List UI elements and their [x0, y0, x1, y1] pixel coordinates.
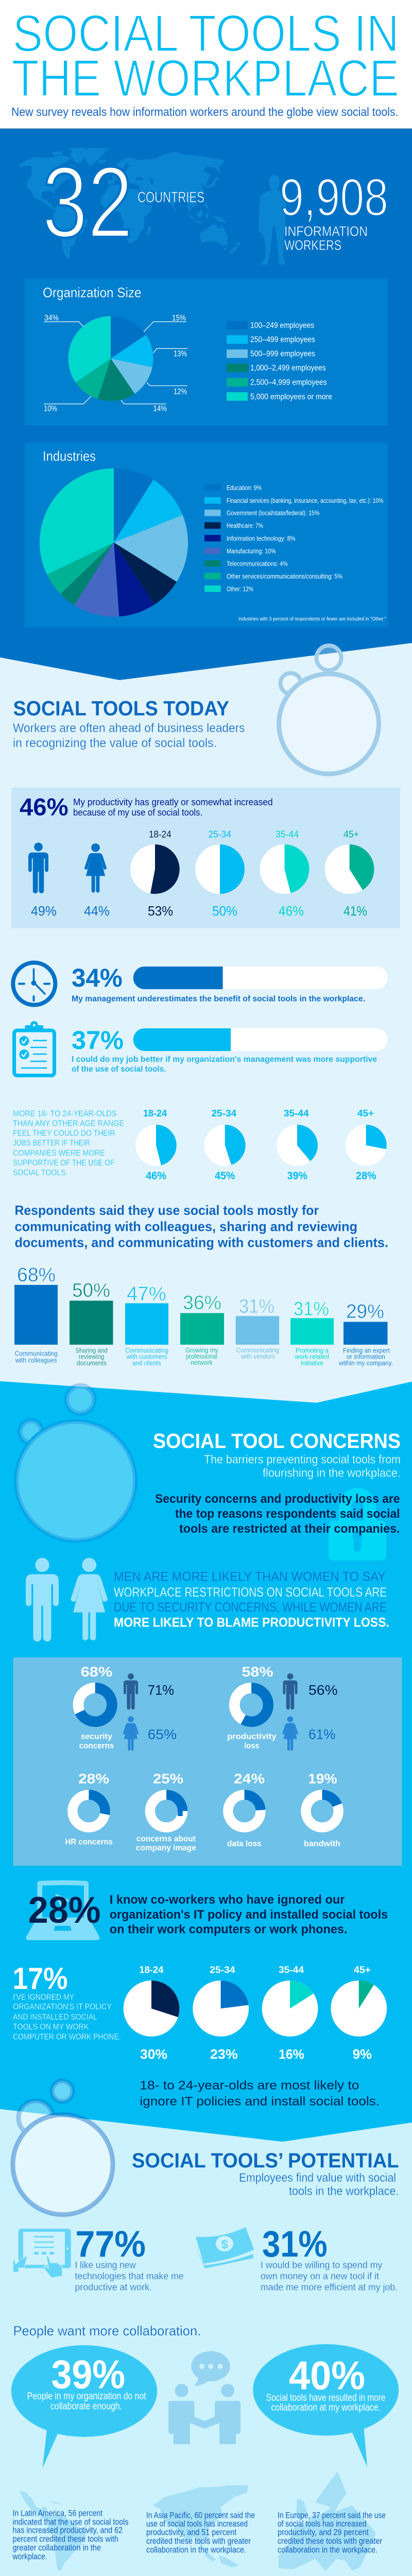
text block: men vs women: MEN ARE MORE LIKELY THAN WOMEN TO SAY	[114, 1569, 386, 1584]
bar: communicating with customers and clients: and clients	[132, 1359, 161, 1367]
panel: concerns breakdown	[13, 1657, 402, 1866]
donut: data loss	[227, 1771, 265, 1849]
statement: 18 to 24 year olds ignore policies	[140, 2078, 380, 2109]
text block: 18 to 24 year olds: SOCIAL TOOLS.	[13, 1168, 68, 1177]
speech bubble: 39%: 39%	[52, 2352, 125, 2397]
stat: 9,908 information workers	[280, 168, 388, 253]
pie: age 45+	[325, 844, 374, 894]
statement: co-workers: on their work computers or work phones.	[110, 1923, 348, 1936]
pie row: supportive by age: 25-34	[212, 1108, 236, 1118]
intro: employees find value: Employees find value with social	[239, 2171, 396, 2184]
pie: age 18-24	[130, 844, 180, 894]
text: Latin America: percent credited these tools with	[12, 2534, 118, 2544]
donut: data loss: data loss	[227, 1840, 262, 1849]
bar: finding an expert	[338, 1301, 393, 1367]
text: Latin America: indicated that the use of social tools	[12, 2517, 129, 2527]
statement: productivity: because of my use of social tools.	[73, 807, 202, 818]
bar: growing my professional network: network	[191, 1359, 213, 1366]
donut: security concerns: security	[81, 1733, 112, 1741]
values: 53%	[148, 903, 173, 919]
donut: bandwith: 19%	[308, 1771, 337, 1786]
text: Asia Pacific: collaboration in the workplace.	[146, 2545, 246, 2554]
donut: HR concerns	[65, 1771, 113, 1846]
pie chart: organization size	[68, 316, 153, 401]
text: Latin America	[12, 2508, 129, 2561]
text block: 18 to 24 year olds: JOBS BETTER IF THEIR	[13, 1139, 90, 1148]
text block: men vs women	[114, 1569, 389, 1630]
text: Europe: collaboration in the workplace.	[278, 2545, 377, 2554]
text: Europe: In Europe, 37 percent said the use	[278, 2510, 386, 2520]
statement: top reasons: the top reasons respondents said social	[175, 1507, 400, 1521]
bar: promoting a work-related initiative: 31%	[294, 1298, 329, 1320]
legend: industries	[204, 484, 383, 592]
region: Europe	[278, 2471, 386, 2571]
donut: bandwith: bandwith	[304, 1840, 340, 1849]
pie row: supportive by age: 45%	[215, 1170, 235, 1182]
values: 50%	[212, 903, 237, 919]
panel: industries	[25, 443, 388, 627]
pie row: ignored policy by age: 35-44	[279, 1965, 304, 1975]
title	[11, 5, 399, 108]
bar: communicating with colleagues: Communicating	[15, 1350, 58, 1357]
donut: HR concerns: HR concerns	[65, 1838, 113, 1846]
world map	[14, 147, 241, 259]
pie row: supportive by age: 46%	[146, 1170, 166, 1182]
heading: social tools today: SOCIAL TOOLS TODAY	[13, 697, 229, 720]
bar: communicating with vendors: with vendors	[241, 1352, 275, 1360]
pie leader lines and percentages: 15%	[172, 314, 186, 323]
heading: how respondents use social tools: Respondents said they use social tools mostly for	[14, 1202, 319, 1218]
stat: 77% new technologies	[75, 2224, 184, 2293]
legend: organization size: 1,000–2,499 employees	[250, 364, 326, 372]
pie leader lines and percentages: 10%	[44, 404, 57, 413]
values: 41%	[344, 903, 367, 919]
heading: social tool concerns: SOCIAL TOOL CONCERNS	[153, 1430, 401, 1453]
heading: how respondents use social tools	[14, 1202, 388, 1250]
bar: sharing and reviewing documents: documents	[77, 1359, 107, 1367]
icon: clipboard	[14, 1021, 55, 1076]
pie leader lines and percentages: 12%	[174, 387, 187, 396]
legend: industries: Other services/communications/consulting: 5%	[227, 572, 342, 580]
statement: top reasons: Security concerns and productivity loss are	[155, 1492, 400, 1506]
intro: barriers: flourishing in the workplace.	[263, 1466, 401, 1480]
stat: 34% management	[72, 963, 387, 1003]
text: Latin America: has increased productivity, and 62	[12, 2526, 123, 2535]
panel: organization size	[25, 279, 388, 426]
background: survey overview section	[0, 129, 412, 680]
legend: industries: Manufacturing: 10%	[227, 547, 276, 555]
pie: age 35-44	[260, 844, 309, 894]
panel: productivity 46%	[11, 788, 400, 928]
icon: man 49%	[28, 842, 48, 893]
icon: group of people ghost, potential section	[13, 2081, 113, 2214]
icon: lock	[329, 1494, 386, 1561]
pie row: ignored policy by age: 45+	[354, 1965, 371, 1975]
intro text	[13, 721, 245, 750]
stat: 32 countries	[42, 146, 204, 259]
statement: supportive: of the use of social tools.	[72, 1065, 166, 1074]
donut: company image: company image	[136, 1844, 196, 1853]
bar: finding an expert: Finding an expert	[343, 1347, 390, 1354]
heading: industries: Industries	[43, 449, 96, 464]
bar chart: uses of social tools	[14, 1264, 393, 1367]
pie leader lines and percentages	[44, 314, 187, 413]
speech bubble: 39%: People in my organization do not	[27, 2391, 146, 2402]
donut: productivity loss: loss	[244, 1741, 260, 1750]
statement: new technologies: technologies that make me	[75, 2270, 184, 2281]
age labels	[149, 829, 359, 840]
statement: productivity	[73, 797, 273, 818]
statement: ignored IT policy: ORGANIZATION'S IT POLICY	[13, 2003, 112, 2011]
text: Asia Pacific: productivity, and 51 percent	[146, 2528, 236, 2537]
icon: tablet with hands	[13, 2229, 71, 2278]
background: concerns section	[0, 1381, 412, 2142]
pie row: supportive by age: 18-24	[143, 1108, 167, 1118]
donut: company image: concerns about	[136, 1835, 196, 1843]
heading: social tools today	[13, 697, 245, 750]
icon: woman 44%	[84, 843, 107, 893]
statement: supportive: I could do my job better if my organization's management was more supportive	[72, 1055, 377, 1064]
gender split: productivity loss: 61%	[308, 1727, 336, 1742]
age labels: 18-24	[149, 829, 171, 840]
stat: 46%: 46%	[20, 793, 68, 821]
bar: communicating with colleagues: 68%	[17, 1264, 56, 1286]
statement: new technologies: I like using new	[75, 2260, 136, 2270]
pie row: ignored policy by age: 16%	[279, 2046, 304, 2062]
icon: group of people ghost, today section	[279, 646, 379, 774]
bar: communicating with customers and clients: with customers	[126, 1353, 167, 1361]
text: Latin America: In Latin America, 56 percent	[12, 2508, 102, 2518]
bar: 34%	[133, 967, 387, 989]
pie leader lines and percentages: 34%	[44, 314, 59, 323]
icon: money bill	[195, 2227, 254, 2268]
values: 44%	[84, 903, 110, 919]
statement: 18 to 24 year olds ignore policies: ignore IT policies and install social tools.	[140, 2095, 380, 2109]
age labels: 45+	[344, 829, 359, 840]
text: Asia Pacific: In Asia Pacific, 60 percent said the	[146, 2510, 255, 2520]
pie row: supportive by age: 39%	[287, 1170, 307, 1182]
pie row: ignored policy by age: 9%	[353, 2046, 372, 2062]
donut: security concerns: concerns	[79, 1741, 114, 1750]
pie row: ignored policy by age: 23%	[210, 2046, 238, 2062]
bar: promoting a work-related initiative: work-related	[294, 1353, 329, 1361]
stat: 31% own money	[261, 2224, 398, 2293]
legend: organization size: 5,000 employees or more	[250, 393, 332, 401]
donut: data loss: 24%	[234, 1771, 265, 1786]
icon: large woman	[71, 1558, 108, 1640]
text: Asia Pacific	[146, 2510, 255, 2554]
donut: security concerns	[78, 1664, 114, 1750]
pie row: ignored policy by age: 25-34	[210, 1965, 235, 1975]
bar: communicating with vendors	[236, 1296, 279, 1360]
pie row: supportive by age	[135, 1108, 387, 1182]
text block: 18 to 24 year olds: MORE 18- TO 24-YEAR-OLDS	[13, 1109, 116, 1118]
stat: 9,908 information workers: WORKERS	[284, 238, 341, 253]
speech bubble: 40%	[253, 2344, 399, 2467]
legend: organization size: 100–249 employees	[250, 321, 314, 330]
donut: security concerns: 68%	[81, 1664, 112, 1680]
statement: new technologies	[75, 2260, 184, 2293]
pie leader lines and percentages: 14%	[153, 404, 167, 413]
statement: 18 to 24 year olds ignore policies: 18- to 24-year-olds are most likely to	[140, 2078, 359, 2093]
legend: industries: Information technology: 8%	[227, 535, 296, 542]
bar: communicating with vendors: Communicating	[236, 1346, 279, 1354]
pie row: ignored policy by age: 18-24	[139, 1965, 163, 1975]
stat: 17% ignored IT policy	[12, 1962, 121, 2041]
text block: 18 to 24 year olds: COMPANIES WERE MORE	[13, 1149, 105, 1158]
icon: person silhouette	[259, 175, 286, 265]
bar: sharing and reviewing documents: Sharing and	[75, 1347, 108, 1354]
donut: bandwith	[304, 1771, 340, 1849]
text block: 18 to 24 year olds: THAN ANY OTHER AGE RANGE	[13, 1119, 124, 1128]
intro: barriers: The barriers preventing social tools from	[204, 1453, 401, 1466]
bar: 37%	[133, 1028, 387, 1051]
legend: industries: Education: 9%	[227, 484, 262, 492]
statement: management: My management underestimates the benefit of social tools in the workplace.	[72, 994, 365, 1003]
bar: sharing and reviewing documents: reviewing	[78, 1353, 104, 1361]
statement: own money: I would be willing to spend my	[261, 2260, 383, 2270]
icon: laptop	[26, 1880, 100, 1940]
statement: own money: made me more efficient at my job.	[261, 2282, 398, 2293]
bar: growing my professional network: Growing my	[185, 1346, 218, 1354]
text: Europe: productivity, and 29 percent	[278, 2528, 369, 2537]
statement: own money: own money on a new tool if it	[261, 2270, 379, 2281]
bar: finding an expert: within my company.	[338, 1359, 393, 1367]
statement: productivity: My productivity has greatly or somewhat increased	[73, 797, 273, 807]
gender split: productivity loss: 56%	[308, 1682, 338, 1698]
icon: group of people ghost, concerns section	[16, 1386, 135, 1540]
heading: people want more collaboration: People want more collaboration.	[13, 2323, 201, 2338]
statement: co-workers: I know co-workers who have ignored our	[110, 1893, 345, 1907]
legend: industries: Telecommunications: 4%	[227, 560, 288, 568]
stat: 37% supportive management	[72, 1026, 387, 1074]
intro: employees find value: tools in the workplace.	[289, 2184, 399, 2198]
text: Europe: of social tools has increased	[278, 2519, 367, 2529]
stat: 17% ignored IT policy: 17%	[12, 1962, 68, 1996]
speech bubble: 39%: collaborate enough.	[50, 2401, 122, 2412]
text block: 18 to 24 year olds: FEEL THEY COULD DO THEIR	[13, 1129, 115, 1138]
donut: HR concerns: 28%	[78, 1771, 109, 1786]
bar: promoting a work-related initiative: Promoting a	[296, 1347, 329, 1354]
background: potential section	[0, 2102, 412, 2576]
donut: productivity loss: productivity	[227, 1733, 277, 1741]
age labels: 35-44	[276, 829, 299, 840]
legend: industries: Other: 12%	[227, 585, 253, 592]
bar: promoting a work-related initiative	[290, 1298, 334, 1367]
gender split: security concerns	[123, 1673, 177, 1751]
statement: ignored IT policy	[13, 1993, 121, 2041]
donut: productivity loss: 58%	[242, 1664, 273, 1680]
gender split: security concerns: 65%	[148, 1727, 177, 1742]
stat: 32 countries: COUNTRIES	[138, 190, 204, 206]
pie row: ignored policy by age: 30%	[140, 2046, 167, 2062]
heading: how respondents use social tools: communicating with colleagues, sharing and reviewing	[14, 1219, 357, 1234]
icon: money bill: $	[221, 2238, 229, 2251]
heading: social tool concerns	[153, 1430, 401, 1536]
pie chart: industries	[40, 468, 188, 617]
background: today section	[0, 639, 412, 1412]
speech bubble: 40%: Social tools have resulted in more	[266, 2393, 385, 2403]
gender split: productivity loss	[282, 1673, 338, 1751]
bar: promoting a work-related initiative: initiative	[301, 1359, 323, 1367]
stat: 28% co-workers: 28%	[28, 1890, 100, 1931]
statement: ignored IT policy: I'VE IGNORED MY	[13, 1993, 74, 2002]
text: Europe	[278, 2510, 386, 2554]
bar: communicating with vendors: 31%	[239, 1296, 274, 1317]
stat: 77% new technologies: 77%	[75, 2224, 146, 2265]
legend: industries: Healthcare: 7%	[227, 521, 263, 530]
bar: communicating with colleagues: with colleagues	[15, 1356, 57, 1364]
statement: ignored IT policy: COMPUTER OR WORK PHONE.	[13, 2033, 121, 2041]
bar: finding an expert: or information	[347, 1353, 385, 1361]
legend: organization size: 250–499 employees	[250, 335, 315, 344]
region: Latin America	[12, 2491, 129, 2571]
legend: industries: Government (local/state/federal): 15%	[227, 509, 319, 517]
text block: 18 to 24 year olds: SUPPORTIVE OF THE USE OF	[13, 1159, 114, 1167]
statement: new technologies: productive at work.	[75, 2282, 152, 2293]
text block: men vs women: MORE LIKELY TO BLAME PRODUCTIVITY LOSS.	[114, 1616, 389, 1630]
values: 49%	[31, 903, 57, 919]
bar: growing my professional network	[180, 1292, 224, 1366]
stat: 34% management: 34%	[72, 963, 123, 992]
stat: 9,908 information workers: INFORMATION	[284, 224, 368, 239]
legend: organization size: 2,500–4,999 employees	[250, 378, 327, 387]
bar: sharing and reviewing documents: 50%	[72, 1280, 110, 1301]
donut: company image: 25%	[153, 1771, 183, 1786]
gender split: security concerns: 71%	[148, 1682, 174, 1698]
stat: 31% own money: 31%	[262, 2224, 328, 2265]
stat: 37% supportive management: 37%	[72, 1026, 124, 1055]
values	[31, 903, 367, 919]
stat: 9,908 information workers: 9,908	[280, 168, 388, 227]
bar: finding an expert: 29%	[346, 1301, 384, 1323]
text: Latin America: greater collaboration in the	[12, 2543, 101, 2553]
pie: age 25-34	[195, 844, 245, 894]
values: 46%	[279, 903, 304, 919]
stat: 32 countries: 32	[42, 146, 133, 259]
age labels: 25-34	[209, 829, 231, 840]
intro text: Workers are often ahead of business leaders	[13, 721, 245, 735]
text block: 18 to 24 year olds	[13, 1109, 124, 1177]
heading: how respondents use social tools: documents, and communicating with customers and clients.	[14, 1235, 388, 1250]
text: Asia Pacific: credited these tools with greater	[146, 2536, 251, 2546]
donut: productivity loss	[227, 1664, 277, 1750]
icon: large man	[26, 1558, 59, 1641]
statement: own money	[261, 2260, 398, 2293]
bar: communicating with customers and clients: Communicating	[125, 1347, 168, 1354]
bar: communicating with customers and clients	[125, 1283, 168, 1367]
text: Asia Pacific: use of social tools has increased	[146, 2519, 248, 2529]
stat: 28% co-workers	[28, 1890, 388, 1936]
intro text: in recognizing the value of social tools.	[13, 736, 217, 750]
heading: organization size: Organization Size	[43, 285, 141, 300]
heading: social tools' potential	[132, 2149, 399, 2198]
icon: two people talking	[168, 2351, 241, 2444]
text: Europe: credited these tools with greater	[278, 2536, 383, 2546]
speech bubble: 40%: 40%	[289, 2353, 365, 2398]
pie row: supportive by age: 28%	[356, 1170, 376, 1182]
statement: ignored IT policy: TOOLS ON MY WORK	[13, 2023, 89, 2031]
pie row: ignored policy by age	[124, 1965, 387, 2062]
heading: social tools' potential: SOCIAL TOOLS’ POTENTIAL	[132, 2149, 399, 2172]
legend: organization size: 500–999 employees	[250, 349, 315, 359]
bar: communicating with customers and clients: 47%	[127, 1283, 166, 1305]
statement: ignored IT policy: AND INSTALLED SOCIAL	[13, 2013, 97, 2022]
bar: growing my professional network: 36%	[183, 1292, 221, 1314]
pie row: supportive by age: 35-44	[284, 1108, 309, 1118]
speech bubble: 40%: collaboration at my workplace.	[271, 2402, 381, 2413]
intro: barriers	[204, 1453, 401, 1480]
icon: clock	[13, 962, 55, 1005]
statement: top reasons	[155, 1492, 400, 1536]
statement: co-workers: organization's IT policy and installed social tools	[110, 1908, 388, 1922]
statement: top reasons: tools are restricted at their companies.	[179, 1522, 400, 1536]
statement: supportive	[72, 1055, 377, 1074]
statement: co-workers	[110, 1893, 388, 1936]
donut: company image	[136, 1771, 196, 1853]
pie leader lines and percentages: 13%	[174, 349, 187, 359]
intro: employees find value	[239, 2171, 399, 2198]
region: Asia Pacific	[146, 2485, 255, 2567]
text: Latin America: workplace.	[12, 2551, 47, 2561]
bar: sharing and reviewing documents	[70, 1280, 113, 1367]
pie row: supportive by age: 45+	[357, 1108, 374, 1118]
bar: growing my professional network: professional	[186, 1352, 217, 1360]
footnote: industries: Industries with 3 percent of respondents or fewer are included in "Other."	[238, 616, 386, 622]
speech bubble: 39%	[11, 2345, 157, 2468]
legend: organization size	[227, 321, 332, 401]
bar: communicating with colleagues	[14, 1264, 58, 1364]
